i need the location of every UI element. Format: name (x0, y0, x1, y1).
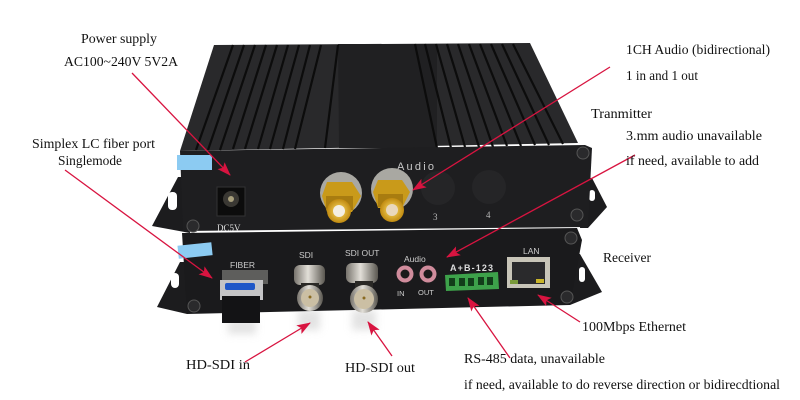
arrow: HD-SDI out (368, 322, 392, 356)
arrow: 3.mm audio (447, 155, 635, 257)
right mounting flange (580, 178, 607, 228)
label: power supply (64, 32, 179, 70)
label: 3.mm audio (626, 129, 762, 169)
label: ethernet: 100Mbps Ethernet (582, 320, 686, 335)
label: 3.mm audio: 3.mm audio unavailable (626, 129, 762, 144)
flange slots (168, 190, 595, 210)
label: power supply: Power supply (81, 32, 157, 47)
audio label: Audio (397, 161, 434, 173)
fiber port: FIBER (230, 260, 255, 270)
receiver unit (157, 228, 602, 323)
arrow: RS-485 (468, 298, 510, 358)
label: RS-485: if need, available to do reverse direction or bidirecdtional (464, 378, 780, 393)
RS-485 terminal block: A+B-123 (450, 263, 493, 273)
DC5V power jack: DC5V (217, 223, 241, 233)
label: RS-485: RS-485 data, unavailable (464, 352, 605, 367)
flange slots (171, 267, 585, 288)
label: receiver: Receiver (603, 251, 651, 266)
top heat sink (180, 43, 578, 151)
arrow: HD-SDI in (245, 323, 310, 362)
warranty sticker (177, 155, 212, 170)
label: 3.mm audio: if need, available to add (626, 154, 759, 169)
label: power supply: AC100~240V 5V2A (64, 55, 179, 70)
blank port 3 (421, 171, 455, 222)
SDI OUT connector (345, 248, 379, 313)
RCA connector 1 (320, 172, 362, 223)
LAN port (507, 246, 550, 288)
label: fiber port: Singlemode (58, 154, 122, 169)
RCA connector 2 (371, 168, 413, 222)
left mounting flange (152, 177, 190, 233)
LAN port: LAN (523, 246, 540, 256)
RS-485 terminal block (445, 263, 499, 291)
blank port 4: 4 (486, 210, 491, 220)
arrow: power supply (132, 73, 230, 175)
front panel (180, 145, 592, 231)
label: RS-485 (464, 352, 780, 393)
SDI OUT connector: SDI OUT (345, 248, 379, 258)
fiber port (220, 260, 268, 323)
DC5V power jack (217, 187, 245, 233)
audio ports: OUT (418, 288, 434, 297)
arrow: Ethernet (538, 295, 580, 322)
label: HD-SDI in: HD-SDI in (186, 358, 250, 373)
arrow: fiber port (65, 170, 212, 278)
label: fiber port: Simplex LC fiber port (32, 137, 155, 152)
transmitter unit (152, 43, 607, 233)
audio ports (396, 254, 436, 298)
arrow: audio (413, 67, 610, 190)
receiver front panel (182, 228, 582, 314)
label: transmitter: Tranmitter (591, 107, 652, 122)
audio ports: IN (397, 289, 404, 298)
audio ports: Audio (404, 254, 426, 264)
label: fiber port (32, 137, 155, 169)
label: HD-SDI out: HD-SDI out (345, 361, 415, 376)
label: audio: 1 in and 1 out (626, 69, 698, 84)
panel screws (187, 147, 589, 232)
SDI connector (294, 250, 325, 311)
screws (188, 232, 577, 312)
SDI connector: SDI (299, 250, 313, 260)
right flange (560, 254, 602, 305)
connector shadows (228, 310, 376, 334)
blank port 4 (472, 170, 506, 220)
blank port 3: 3 (433, 212, 438, 222)
label: audio: 1CH Audio (bidirectional) (626, 43, 770, 58)
label: audio (626, 43, 770, 84)
left flange (157, 262, 195, 314)
sticker (177, 242, 213, 259)
